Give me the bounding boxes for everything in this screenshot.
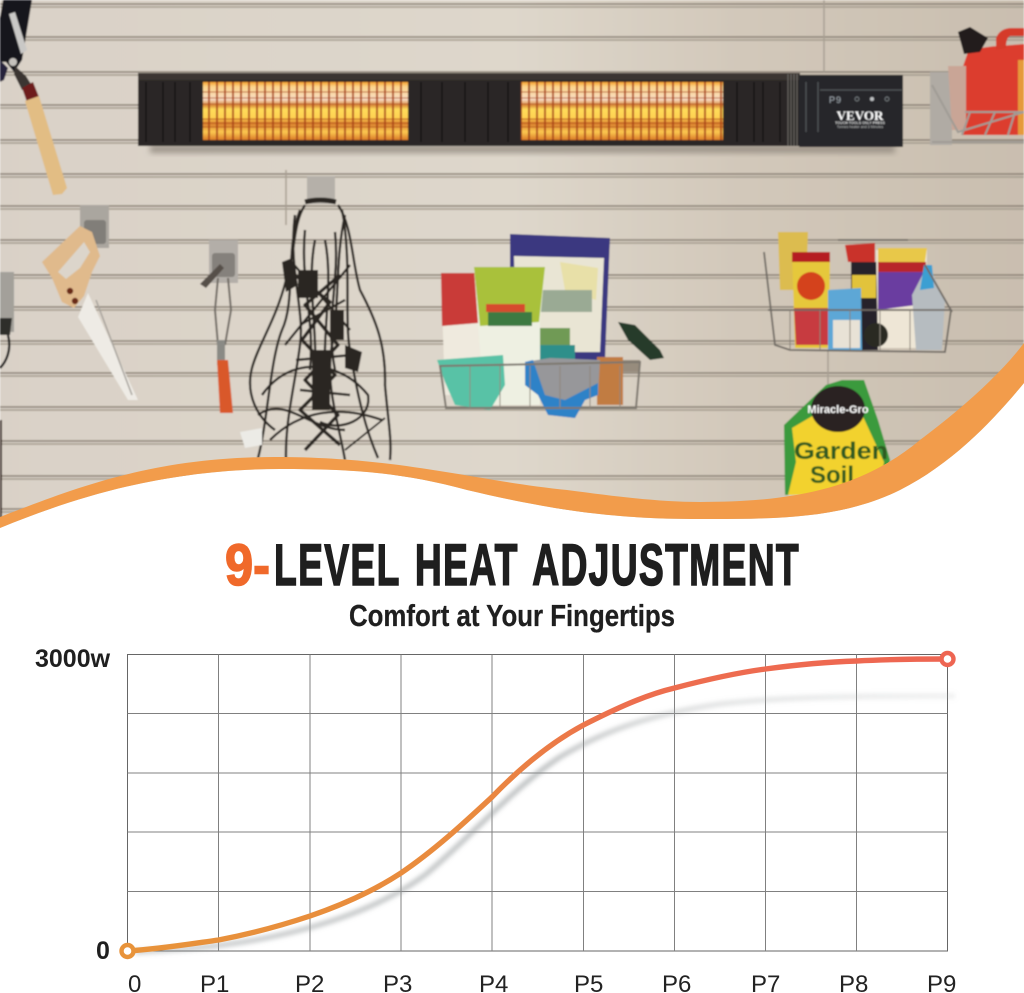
subtitle: Comfort at Your Fingertips [349, 598, 675, 633]
control panel: P9 [829, 95, 842, 105]
panel: garage wall photo [0, 0, 1024, 530]
title highlight: 9- [225, 533, 270, 598]
icon: garden soil bag: Soil [810, 462, 854, 489]
heater ribs [788, 74, 797, 146]
control panel: VEVOR [837, 108, 884, 123]
icon: hedge shears [0, 0, 67, 195]
heater vents [146, 82, 780, 142]
icon: small hammer [200, 240, 238, 413]
y axis label zero: 0 [96, 937, 110, 965]
wall background [0, 0, 1024, 530]
icon: infrared patio heater [138, 73, 903, 153]
power curve [128, 659, 948, 951]
y axis label max: 3000w [35, 645, 111, 673]
icon: garden soil bag: Garden [794, 438, 888, 465]
heater wall shadow [150, 145, 895, 153]
icon: red fuel can on shelf [930, 27, 1024, 145]
icon: hand saw [42, 205, 138, 400]
orange wave band [0, 343, 1024, 528]
control panel: Tonnes heater and 3 Minutes [837, 125, 883, 129]
curve shadow [135, 696, 955, 952]
control panel [799, 75, 903, 147]
heater body [138, 73, 800, 146]
wall slats [0, 0, 1024, 512]
icon: wire basket with garden supplies [437, 234, 664, 418]
white lower background [0, 383, 1024, 993]
chart: heat power by level [35, 645, 956, 993]
icon: garden soil bag [784, 380, 890, 495]
heating element left [203, 82, 408, 140]
icon: extension cords [240, 176, 391, 460]
heating element right [521, 82, 723, 140]
x axis labels [128, 971, 956, 993]
start marker [122, 945, 134, 957]
control panel: TOUCH TOOLS ONLY PRESS [835, 121, 885, 125]
icon: garden soil bag: Miracle-Gro [807, 404, 869, 416]
icon: wire basket with cleaning supplies [764, 232, 952, 352]
chart grid [128, 654, 948, 951]
icon: left edge hook with cable [0, 272, 14, 520]
title: 9-Level Heat Adjustment [225, 533, 800, 598]
end marker [942, 653, 954, 665]
